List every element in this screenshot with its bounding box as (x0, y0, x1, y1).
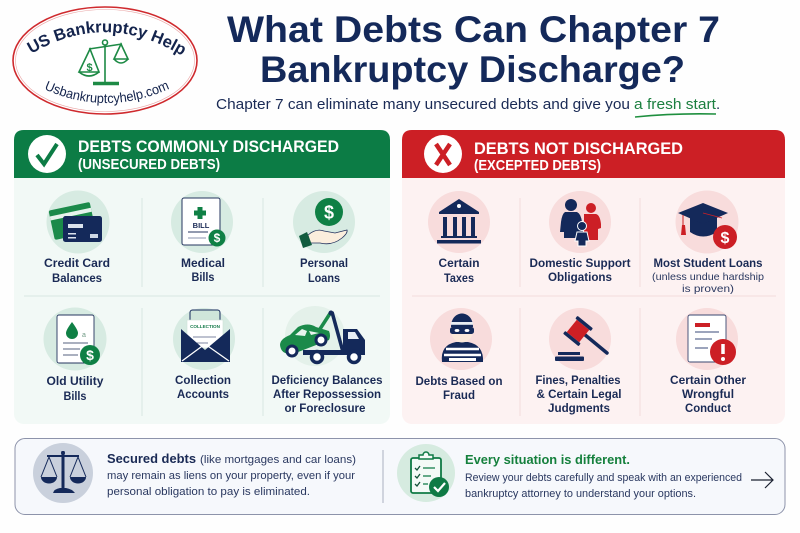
item: personal loans: Personal (300, 258, 348, 270)
text: secured debts: personal obligation to pay is eliminated. (107, 486, 310, 498)
logo: US Bankruptcy Help: US Bankruptcy Help (26, 21, 185, 56)
footer panel (15, 438, 785, 514)
item: debts based on fraud: Debts Based on (416, 376, 502, 388)
panel: debts commonly discharged (14, 130, 390, 424)
icon: scales of justice (33, 443, 93, 503)
item: certain taxes: Certain (438, 258, 480, 270)
item: fines, penalties and judgments (536, 308, 622, 415)
item: certain other wrongful conduct: Wrongful (682, 389, 734, 401)
title: What Debts Can Chapter 7 (227, 9, 720, 50)
item: most student loans: (unless undue hardship (652, 271, 764, 283)
panel header: red: DEBTS NOT DISCHARGED (474, 140, 683, 158)
text: secured debts: (like mortgages and car loans) (200, 454, 356, 466)
title: Bankruptcy Discharge? (260, 49, 685, 90)
subtitle: Chapter 7 can eliminate many unsecured debts and give you (216, 96, 630, 113)
item: debts based on fraud (416, 308, 502, 402)
item: medical bills (171, 191, 233, 284)
logo: US Bankruptcy Help: $ (86, 62, 93, 74)
subtitle: . (716, 96, 720, 113)
arrow (751, 472, 773, 488)
item: credit card balances: Credit Card (44, 258, 110, 270)
text: every situation is different: bankruptcy attorney to understand your options. (465, 488, 696, 500)
item: personal loans (293, 191, 355, 285)
logo: US Bankruptcy Help: Usbankruptcyhelp.com (46, 81, 169, 106)
title (227, 9, 720, 90)
item: old utility bills (44, 308, 106, 403)
item: deficiency balances tow truck: Deficiency Balances (272, 375, 382, 387)
item: medical bills: BILL (193, 221, 210, 230)
text: every situation is different: Review your debts carefully and speak with an experienced (465, 472, 742, 484)
panel header: red (402, 130, 785, 178)
item: old utility bills: Bills (64, 391, 86, 403)
panel header: green (14, 130, 390, 178)
item: certain taxes (428, 191, 490, 285)
item: old utility bills: Old Utility (46, 376, 104, 388)
item: certain taxes: Taxes (444, 273, 474, 285)
item: old utility bills: a (82, 332, 86, 339)
subtitle: a fresh start (634, 96, 717, 113)
item: fines, penalties and judgments: Fines, Penalties (536, 375, 620, 387)
item: most student loans (652, 190, 764, 295)
item: domestic support obligations: Obligations (548, 272, 612, 284)
item: most student loans: is proven) (682, 283, 734, 295)
item: collection accounts (173, 308, 235, 401)
item: fines, penalties and judgments: Judgments (548, 403, 610, 415)
panel header: red: (EXCEPTED DEBTS) (474, 158, 601, 174)
item: most student loans: $ (721, 230, 730, 247)
item: domestic support obligations: Domestic Support (530, 258, 631, 270)
subtitle (216, 96, 720, 117)
panel header: green: (UNSECURED DEBTS) (78, 157, 220, 173)
item: medical bills: Bills (192, 272, 214, 284)
panel: debts not discharged (402, 130, 785, 424)
item: deficiency balances tow truck (272, 306, 382, 415)
item: deficiency balances tow truck: or Foreclosure (284, 403, 366, 415)
item: personal loans: $ (324, 202, 334, 222)
item: collection accounts: Collection (175, 375, 231, 387)
item: certain other wrongful conduct: Certain Other (670, 375, 747, 387)
text: every situation is different: Every situation is different. (465, 452, 630, 467)
text: secured debts: may remain as liens on your property, even if your (107, 470, 355, 482)
item: old utility bills: $ (86, 347, 94, 363)
item: collection accounts: COLLECTION (190, 324, 221, 329)
item: domestic support obligations (530, 191, 631, 284)
item: credit card balances: Balances (52, 273, 102, 285)
text: every situation is different (465, 452, 742, 500)
item: certain other wrongful conduct (670, 308, 747, 415)
item: most student loans: Most Student Loans (654, 258, 762, 270)
item: fines, penalties and judgments: & Certain Legal (536, 389, 622, 401)
item: credit card balances (44, 190, 110, 285)
item: certain other wrongful conduct: Conduct (685, 403, 731, 415)
text: secured debts: Secured debts (107, 452, 196, 466)
logo: US Bankruptcy Help (12, 6, 198, 115)
item: medical bills: $ (214, 231, 221, 245)
item: deficiency balances tow truck: After Repossession (273, 389, 381, 401)
icon: clipboard checklist (397, 444, 455, 502)
item: medical bills: Medical (181, 258, 225, 270)
item: personal loans: Loans (308, 273, 340, 285)
item: debts based on fraud: Fraud (443, 390, 475, 402)
item: collection accounts: Accounts (177, 389, 229, 401)
text: secured debts (107, 452, 356, 498)
panel header: green: DEBTS COMMONLY DISCHARGED (78, 138, 339, 156)
